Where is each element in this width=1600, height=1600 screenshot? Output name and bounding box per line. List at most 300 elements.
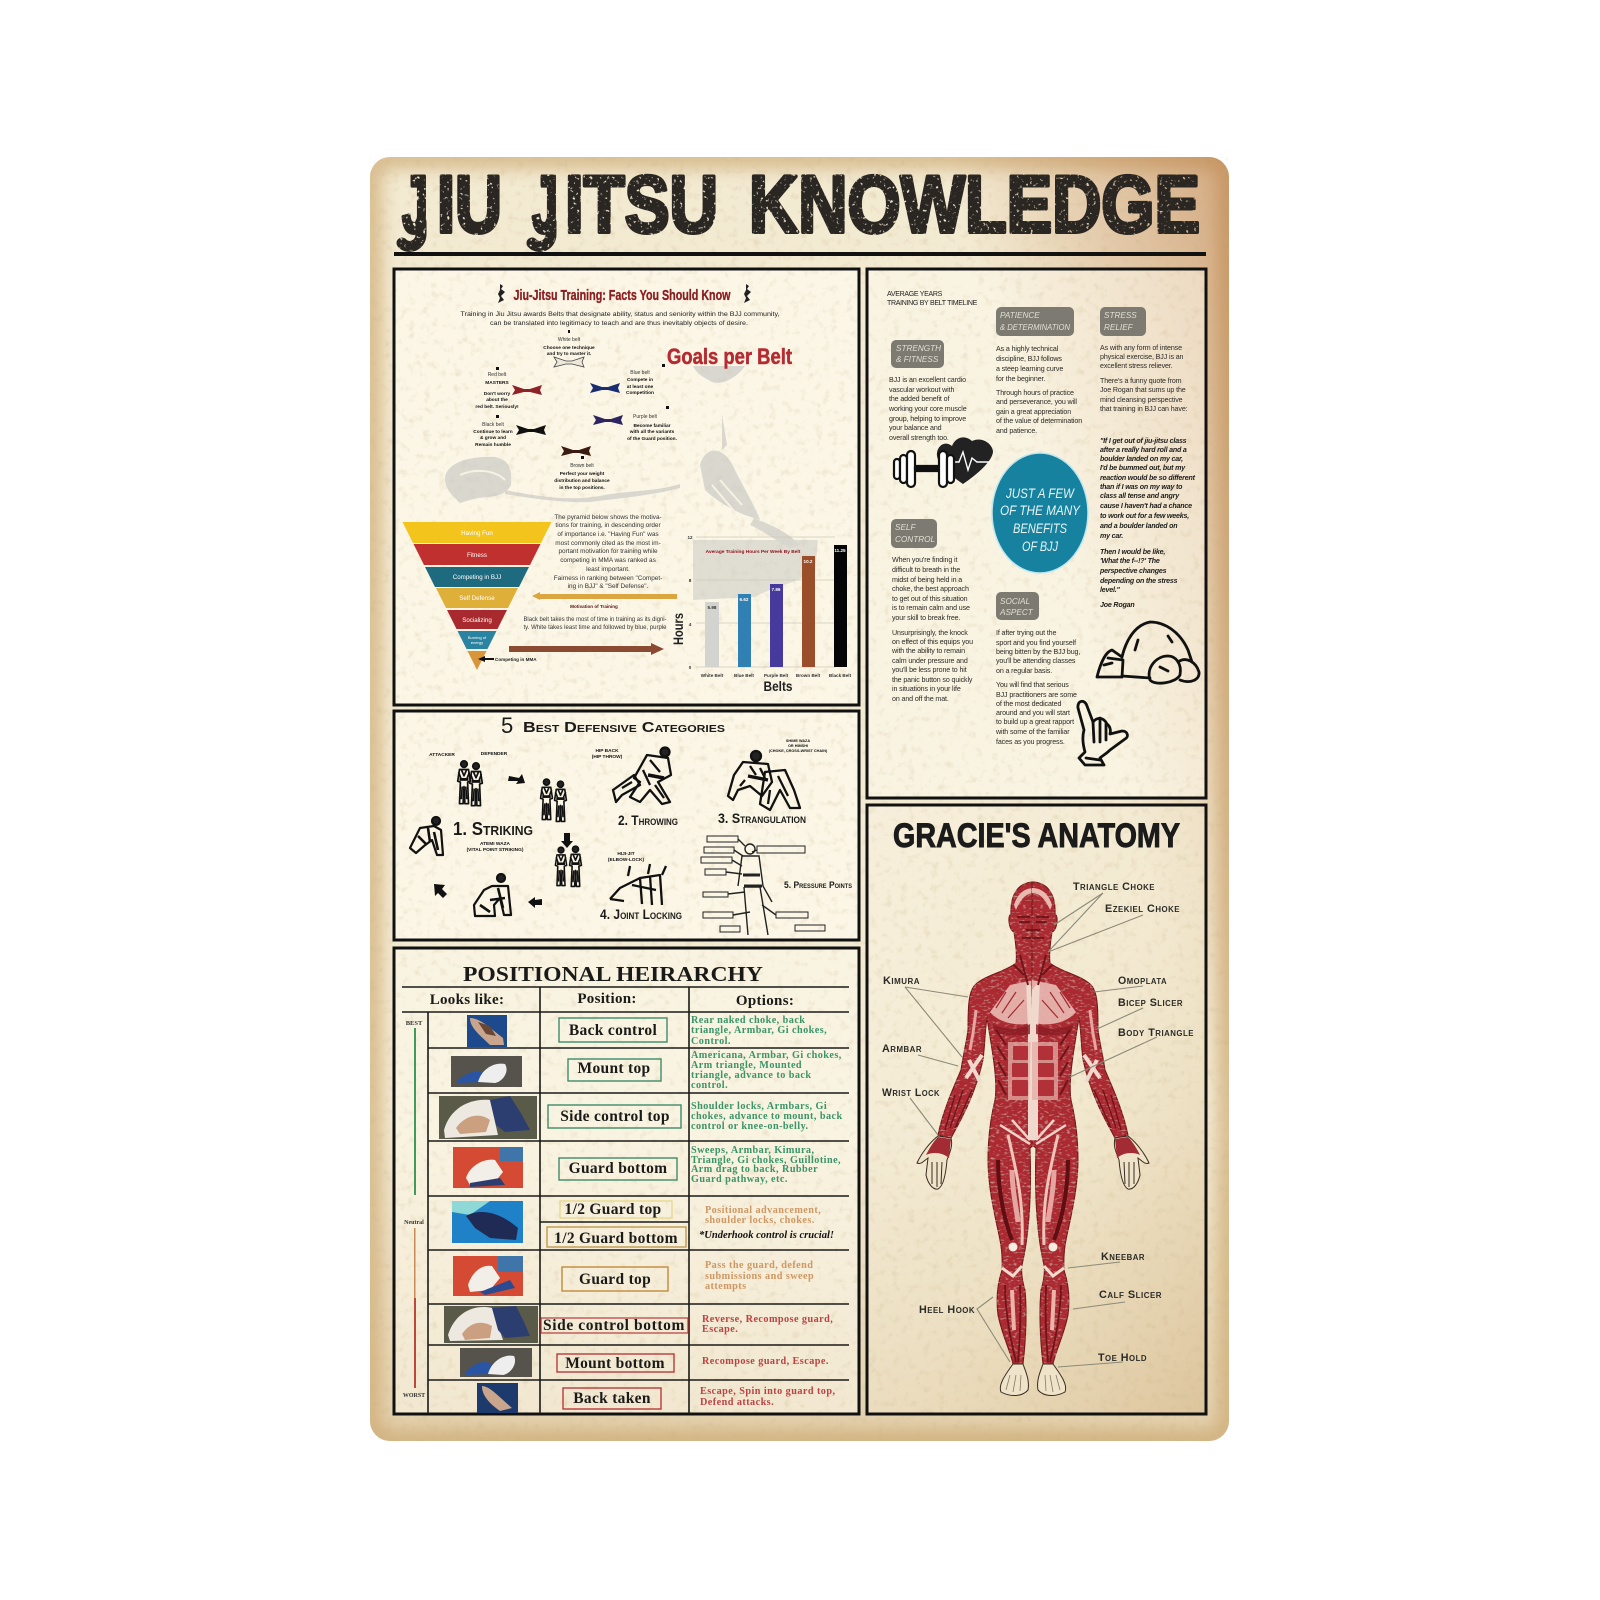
options: back control: Rear naked choke, back — [691, 1015, 805, 1026]
text: social: being bitten by the BJJ bug, — [996, 648, 1080, 656]
pyramid explanation text — [554, 514, 662, 590]
text: stress: As with any form of intense — [1100, 344, 1182, 352]
athlete silhouette — [445, 366, 818, 600]
red belt goal — [475, 367, 542, 410]
caption: motivation: Motivation of Training — [570, 604, 618, 609]
hierarchy scale — [403, 1020, 425, 1399]
text: self control: on and off the mat. — [892, 695, 949, 703]
text: self control: Unsurprisingly, the knock — [892, 629, 968, 637]
text: strength: vascular workout with — [889, 386, 954, 394]
motivation pyramid — [402, 522, 552, 670]
text: stress: physical exercise, BJJ is an — [1100, 353, 1184, 361]
technique labels — [882, 881, 1194, 1364]
pill: patience and determination — [996, 307, 1074, 336]
left half of body — [917, 882, 1038, 1396]
box: back control: Back control — [569, 1022, 657, 1039]
bar chart: average training hours: 11.25 — [834, 548, 846, 553]
text: self control: difficult to breath in the — [892, 566, 960, 574]
text: patience: of the value of determination — [996, 417, 1082, 425]
text: self control: you'll be less prone to hit — [892, 666, 967, 674]
text: strength: overall strength too. — [889, 434, 949, 442]
bar chart: average training hours: 8 — [689, 578, 692, 583]
hierarchy scale: WORST — [403, 1393, 425, 1399]
text: self control: midst of being held in a — [892, 576, 962, 584]
text: strength — [888, 376, 967, 442]
figure: striking pair 1: ATTACKER — [429, 752, 455, 758]
text: social: sport and you find yourself — [996, 639, 1076, 647]
callout: just a few benefits: JUST A FEW — [1005, 485, 1075, 501]
options: half guard: *Underhook control is crucial! — [699, 1230, 834, 1241]
blue belt goal: at least one — [627, 384, 654, 390]
blue belt goal: Compete in — [627, 377, 653, 383]
panel: 5 best defensive categories — [394, 711, 859, 940]
technique labels: Bicep Slicer — [1118, 997, 1183, 1009]
pyramid explanation text: least important. — [586, 566, 630, 573]
options: guard bottom: Guard pathway, etc. — [691, 1174, 788, 1185]
text: strength: the added benefit of — [889, 395, 949, 403]
purple belt goal — [593, 406, 677, 442]
pill: stress relief: STRESS — [1104, 311, 1137, 320]
figure: striking pair 1 — [429, 751, 508, 806]
figure: strangulation — [728, 751, 800, 810]
technique labels: Heel Hook — [919, 1304, 975, 1316]
options: guard top: Pass the guard, defend — [705, 1260, 813, 1271]
options: guard top: submissions and sweep — [705, 1271, 814, 1282]
hierarchy scale: Neutral — [404, 1220, 424, 1226]
quote: Joe Rogan: reaction would be so different — [1100, 474, 1196, 482]
red belt goal: about the — [486, 397, 508, 403]
callout: just a few benefits: OF THE MANY — [1000, 502, 1081, 518]
text: self control: When you're finding it — [892, 556, 958, 564]
purple belt goal: of the Guard position. — [627, 436, 677, 442]
red belt goal: red belt. Seriously! — [475, 404, 519, 410]
options: half guard: shoulder locks, chokes. — [705, 1215, 815, 1226]
pill: strength and fitness: & FITNESS — [896, 355, 939, 364]
text: social: with some of the familiar — [995, 728, 1070, 736]
panel: gracie's anatomy — [867, 805, 1206, 1414]
bar chart: average training hours: 5.98 — [708, 605, 717, 610]
quote: Joe Rogan: than if I was on my way to — [1100, 483, 1183, 491]
timeline heading: AVERAGE YEARS — [887, 291, 943, 298]
paper texture — [370, 157, 1229, 1441]
row: side control bottom — [444, 1306, 833, 1343]
technique labels: Kneebar — [1101, 1251, 1145, 1263]
callout: just a few benefits: BENEFITS — [1013, 520, 1068, 536]
options: mount bottom: Recompose guard, Escape. — [702, 1356, 829, 1367]
options: guard bottom — [691, 1145, 841, 1185]
quote: Joe Rogan — [1099, 437, 1196, 609]
bar chart: average training hours: Purple Belt — [764, 673, 789, 678]
technique labels: Wrist Lock — [882, 1087, 940, 1099]
glove strap detail — [460, 471, 742, 512]
photo: back control — [467, 1015, 507, 1047]
text: self control: on effect of this equips you — [892, 638, 973, 646]
quote: Joe Rogan: class all tense and angry — [1100, 492, 1180, 500]
pill: patience and determination: PATIENCE — [1000, 311, 1040, 320]
bar chart: average training hours — [670, 535, 852, 694]
motivation pyramid: energy — [471, 640, 483, 645]
label: 5 pressure points: 5. Pressure Points — [784, 880, 852, 890]
callout: just a few benefits: OF BJJ — [1022, 538, 1059, 554]
icon: boulder — [1097, 622, 1199, 683]
technique labels: Calf Slicer — [1099, 1289, 1162, 1301]
bar chart: average training hours: 7.86 — [772, 587, 781, 592]
arrow: brown right — [509, 643, 664, 655]
technique labels: Omoplata — [1118, 975, 1167, 987]
options: half guard — [699, 1205, 834, 1241]
text: stress: excellent stress reliever. — [1100, 362, 1173, 370]
text: self control: to get out of this situation — [892, 595, 968, 603]
foot — [1000, 1364, 1028, 1396]
text: self control: your skill to break free. — [892, 614, 961, 622]
intro text: can be translated into legitimacy to teach and are thus inevitably objects of desire. — [490, 320, 748, 327]
row: guard bottom — [453, 1145, 841, 1188]
label: shime waza — [769, 739, 828, 753]
pill: social aspect — [996, 592, 1039, 620]
arrow: gold left — [532, 592, 677, 600]
text: self control: the panic button so quickly — [892, 676, 973, 684]
motivation pyramid: Competing in BJJ — [453, 574, 501, 581]
box: back control — [559, 1018, 667, 1042]
options: guard bottom: Triangle, Gi chokes, Guillotine, — [691, 1155, 841, 1166]
box: side control top — [548, 1105, 681, 1128]
row: half guard — [452, 1201, 834, 1247]
bar chart: average training hours: Belts — [764, 678, 793, 694]
motivation pyramid: Burning of — [468, 635, 487, 640]
text: patience: discipline, BJJ follows — [996, 355, 1062, 363]
quote: Joe Rogan: "If I get out of jiu-jitsu class — [1100, 437, 1187, 445]
red belt goal: Red belt — [488, 372, 507, 378]
quote: Joe Rogan: cause I haven't had a chance — [1100, 502, 1192, 510]
box: guard top: Guard top — [579, 1271, 651, 1288]
text: self control — [891, 556, 973, 703]
black belt goal — [473, 415, 546, 448]
column headers: Looks like: — [430, 992, 504, 1008]
competing in MMA pointer — [478, 656, 537, 662]
figure: striking pair 3 — [555, 846, 581, 886]
goals per belt heading: Goals per Belt — [667, 344, 793, 369]
intro text: Training in Jiu Jitsu awards Belts that designate ability, status and seniority within the BJJ community, — [460, 311, 780, 318]
figure: throwing — [592, 748, 671, 804]
title: ITSU — [565, 160, 718, 250]
chart explanation text: ty. White takes least time and followed by blue, purple — [524, 625, 667, 631]
options: back taken — [700, 1386, 835, 1408]
text: social: BJJ practitioners are some — [996, 691, 1077, 699]
label: shime waza: (CHOKE, CROSS-WRIST CHAIN) — [769, 749, 828, 753]
heading — [501, 713, 725, 738]
timeline heading — [887, 291, 978, 307]
pill: social aspect: SOCIAL — [1000, 597, 1030, 606]
diagram: pressure points — [701, 836, 825, 935]
box: half guard top: 1/2 Guard top — [565, 1201, 661, 1218]
pyramid explanation text: most commonly cited as the most im- — [555, 540, 661, 547]
heading: 3 strangulation: 3. Strangulation — [718, 811, 806, 826]
panel backgrounds — [394, 269, 1206, 1414]
options: side control bottom — [702, 1314, 833, 1335]
text: social: you'll be attending classes — [996, 657, 1076, 665]
text: stress: There's a funny quote from — [1100, 377, 1182, 385]
row: guard top — [453, 1256, 814, 1296]
bar chart: average training hours: White Belt — [701, 673, 724, 678]
photo: side control bottom — [444, 1306, 538, 1343]
options: mount top: Americana, Armbar, Gi chokes, — [691, 1050, 842, 1061]
heading: 1 striking: 1. Striking — [453, 819, 533, 839]
heading: 1 striking — [453, 819, 533, 853]
text: patience: and perseverance, you will — [996, 398, 1077, 406]
panel: positional hierarchy table — [394, 948, 859, 1414]
hand — [917, 1136, 952, 1189]
quote: Joe Rogan: I'd be bummed out, but my — [1100, 464, 1186, 472]
box: mount bottom: Mount bottom — [565, 1355, 665, 1372]
bar chart: average training hours: Blue Belt — [734, 673, 754, 678]
heading: 2 throwing: 2. Throwing — [618, 813, 678, 828]
motivation pyramid: Socializing — [462, 617, 492, 624]
title: J — [402, 160, 428, 250]
figure: striking down — [410, 817, 443, 855]
pill: social aspect: ASPECT — [999, 608, 1034, 617]
quote: Joe Rogan: after a really hard roll and a — [1100, 446, 1187, 454]
text: social: on a regular basis. — [996, 667, 1052, 675]
figure: striking pair 4 — [474, 874, 511, 916]
motivation pyramid: Having Fun — [461, 530, 493, 537]
text: patience: and patience. — [996, 427, 1037, 435]
options: back control — [691, 1015, 827, 1047]
text: self control: in situations in your life — [892, 685, 961, 693]
table heading: POSITIONAL HEIRARCHY — [463, 962, 763, 986]
arrow left — [528, 897, 542, 908]
callout: just a few benefits — [992, 453, 1088, 573]
photo: half guard — [452, 1201, 523, 1243]
muscle figure — [917, 882, 1149, 1396]
options: mount top: control. — [691, 1080, 728, 1091]
options: guard top: attempts — [705, 1281, 747, 1292]
pill: strength and fitness — [891, 340, 944, 368]
chart explanation text: Black belt takes the most of time in training as its digni- — [524, 617, 666, 623]
heading: 1 striking: ATEMI WAZA — [480, 841, 511, 847]
bar chart: average training hours: Brown Belt — [796, 673, 821, 678]
pyramid explanation text: Fairness in ranking between "Compet- — [554, 575, 662, 582]
text: patience: for the beginner. — [996, 375, 1045, 383]
quote: Joe Rogan: perspective changes — [1099, 567, 1167, 575]
text: social: around and you will start — [996, 709, 1070, 717]
pill: strength and fitness: STRENGTH — [896, 344, 941, 353]
intro text — [460, 311, 780, 327]
icon: dumbbell and heart — [894, 437, 993, 487]
text: social — [995, 629, 1080, 746]
motivation pyramid: Self Defense — [459, 595, 495, 602]
text: social: of the most dedicated — [996, 700, 1061, 708]
heading: Best Defensive Categories — [523, 720, 725, 736]
bar chart: average training hours: 10.2 — [804, 559, 813, 564]
photo: guard bottom — [453, 1147, 523, 1188]
quote: Joe Rogan: my car. — [1100, 532, 1123, 540]
options: mount top — [691, 1050, 842, 1091]
technique labels: Ezekiel Choke — [1105, 903, 1180, 915]
motivation pyramid: Fitness — [467, 552, 487, 559]
arrow up-left — [434, 884, 447, 898]
row: mount top — [451, 1050, 842, 1091]
text: stress: Joe Rogan that sums up the — [1100, 386, 1186, 394]
white belt goal — [543, 330, 595, 367]
photo: side control top — [439, 1096, 537, 1139]
hierarchy scale: BEST — [406, 1020, 423, 1027]
technique labels: Armbar — [882, 1043, 922, 1055]
photo: mount top — [451, 1056, 522, 1087]
options: side control top — [691, 1101, 843, 1132]
column headers: Options: — [736, 993, 794, 1009]
options: side control bottom: Escape. — [702, 1324, 738, 1335]
purple belt goal: Become familiar — [633, 423, 671, 429]
title: IU — [437, 160, 502, 250]
brown belt goal — [554, 446, 610, 491]
pyramid explanation text: portant motivation for training while — [558, 548, 658, 555]
blue belt goal — [590, 364, 665, 396]
text: social: You will find that serious — [996, 681, 1069, 689]
quote: Joe Rogan: Then I would be like, — [1100, 548, 1165, 556]
white belt goal: and try to master it. — [547, 351, 591, 357]
text: social: to build up a great rapport — [996, 718, 1074, 726]
blue belt goal: Competition — [626, 390, 654, 396]
bar chart: average training hours: Black Belt — [829, 673, 852, 678]
pyramid explanation text: of importance i.e. "Having Fun" was — [557, 531, 659, 538]
options: back control: Control. — [691, 1036, 731, 1047]
text: stress: mind cleansing perspective — [1100, 396, 1183, 404]
text: stress: that training in BJJ can have: — [1100, 405, 1188, 413]
heading: GRACIE'S ANATOMY — [893, 817, 1180, 855]
brown belt goal: distribution and balance — [554, 478, 610, 484]
photo: mount bottom — [460, 1348, 532, 1377]
heading: 1 striking: (VITAL POINT STRIKING) — [467, 847, 524, 853]
box: guard bottom — [559, 1158, 677, 1180]
brown belt goal: Perfect your weight — [560, 471, 605, 477]
box: back taken — [563, 1388, 661, 1409]
anatomy panel tint — [867, 805, 1206, 1414]
box: back taken: Back taken — [573, 1390, 651, 1407]
arrow down — [561, 833, 573, 848]
options: side control bottom: Reverse, Recompose guard, — [702, 1314, 833, 1325]
pyramid explanation text: The pyramid below shows the motiva- — [554, 514, 662, 521]
row: back control — [467, 1015, 827, 1047]
label: shime waza: OR HIMSHI — [788, 744, 808, 748]
box: half guard bottom: 1/2 Guard bottom — [554, 1230, 678, 1247]
text: strength: group, helping to improve — [889, 415, 966, 423]
photo: back taken — [477, 1383, 518, 1413]
bar chart: average training hours: 12 — [687, 535, 693, 540]
column headers — [430, 991, 794, 1009]
quote: Joe Rogan: depending on the stress — [1100, 577, 1178, 585]
pill: self control: CONTROL — [895, 535, 935, 544]
figure: joint locking: (ELBOW-LOCK) — [608, 857, 644, 863]
text: stress — [1100, 344, 1188, 413]
figure: striking pair 1: DEFENDER — [481, 751, 508, 757]
options: half guard: Positional advancement, — [705, 1205, 821, 1216]
bar chart: average training hours: 0 — [689, 665, 692, 670]
black belt goal: Remain humble — [475, 442, 511, 448]
box: guard bottom: Guard bottom — [569, 1160, 667, 1177]
figure: striking pair 2 — [541, 779, 566, 821]
options: mount top: triangle, advance to back — [691, 1070, 811, 1081]
text: patience: a steep learning curve — [996, 365, 1063, 373]
heading with figures: Jiu-Jitsu Training: Facts You Should Know — [514, 287, 731, 304]
options: back taken: Escape, Spin into guard top, — [700, 1386, 835, 1397]
box: mount top: Mount top — [578, 1060, 650, 1077]
black belt goal: & grow and — [480, 435, 506, 441]
title — [402, 160, 1200, 250]
bar chart: average training hours: Average Training Hours Per Week By Belt — [706, 549, 801, 555]
quote: Joe Rogan: to work out for a few weeks, — [1100, 512, 1189, 520]
text: strength: working your core muscle — [888, 405, 967, 413]
panel: jiu-jitsu training facts — [394, 269, 859, 705]
panel: benefits of BJJ — [867, 269, 1206, 798]
text: strength: BJJ is an excellent cardio — [889, 376, 966, 384]
label: shime waza: SHIME WAZA — [786, 739, 810, 743]
pill: patience and determination: & DETERMINATION — [1000, 323, 1070, 332]
quote: Joe Rogan: level." — [1100, 586, 1121, 594]
box: mount top — [568, 1059, 661, 1081]
text: social: If after trying out the — [996, 629, 1057, 637]
text: social: faces as you progress. — [996, 738, 1065, 746]
options: back control: triangle, Armbar, Gi chokes, — [691, 1025, 827, 1036]
text: self control: choke, the best approach — [892, 585, 969, 593]
purple belt goal: Purple belt — [633, 414, 658, 420]
poster background — [370, 157, 1229, 1441]
technique labels: Kimura — [883, 975, 920, 987]
arrow — [508, 774, 525, 784]
black belt goal: Black belt — [482, 422, 504, 428]
purple belt goal: with all the variants — [629, 429, 675, 435]
options: side control top: control or knee-on-belly. — [691, 1121, 809, 1132]
pill: stress relief — [1100, 307, 1146, 336]
timeline heading: TRAINING BY BELT TIMELINE — [887, 300, 978, 307]
title: J — [532, 160, 558, 250]
quote: Joe Rogan: Joe Rogan — [1100, 601, 1135, 609]
bar chart: average training hours: Hours — [670, 613, 686, 645]
text: patience: As a highly technical — [996, 345, 1059, 353]
options: side control top: Shoulder locks, Armbars, Gi — [691, 1101, 827, 1112]
face details — [1017, 917, 1034, 938]
pill: self control: SELF — [895, 523, 916, 532]
title rule — [394, 252, 1206, 256]
text: patience: Through hours of practice — [996, 389, 1074, 397]
text: self control: is to remain calm and use — [892, 604, 970, 612]
heading: 5 — [501, 713, 513, 738]
row: side control top — [439, 1096, 843, 1139]
red belt goal: MASTERS — [485, 380, 510, 386]
pill: self control — [891, 519, 937, 548]
right half of body — [1028, 882, 1149, 1396]
figure: throwing: HIP BACK — [595, 748, 619, 754]
white belt goal: White belt — [558, 337, 581, 343]
red belt goal: Don't worry — [484, 391, 511, 397]
white belt goal: Choose one technique — [543, 345, 595, 351]
technique labels: Body Triangle — [1118, 1027, 1194, 1039]
options: guard top — [705, 1260, 814, 1292]
black belt goal: Continue to learn — [473, 429, 513, 435]
figure: throwing: (HIP THROW) — [592, 754, 623, 760]
heading: 4 joint locking: 4. Joint Locking — [600, 907, 682, 922]
icon: shaka hand — [1078, 701, 1127, 765]
title: KNOWLEDGE — [749, 160, 1200, 250]
chart explanation text — [524, 617, 667, 631]
quote: Joe Rogan: 'What the f--!?' The — [1100, 557, 1160, 565]
options: guard bottom: Sweeps, Armbar, Kimura, — [691, 1145, 814, 1156]
box: side control bottom: Side control bottom — [543, 1317, 685, 1334]
figure: joint locking — [608, 851, 666, 905]
pyramid explanation text: tions for training, in descending order — [555, 522, 661, 529]
text: patience — [996, 345, 1082, 435]
row: mount bottom — [460, 1348, 829, 1377]
row: back taken — [477, 1383, 835, 1413]
